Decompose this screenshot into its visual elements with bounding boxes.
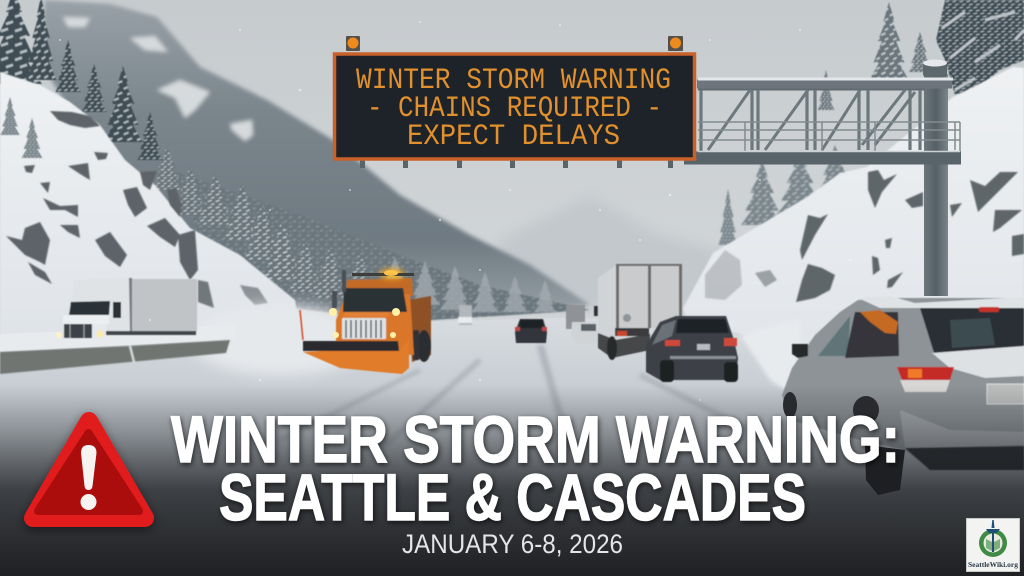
forest band trees <box>152 146 377 300</box>
left slope rocks <box>6 111 268 308</box>
vehicle: large silver SUV <box>782 296 1024 470</box>
background: right forest <box>718 145 856 245</box>
plow lights <box>329 269 414 338</box>
date subtitle: JANUARY 6-8, 2026 <box>402 529 623 559</box>
sign message text: - CHAINS REQUIRED - <box>367 92 662 126</box>
falling snow <box>59 21 851 401</box>
background: forested mountain <box>40 0 590 320</box>
vehicle: orange snow plow truck <box>300 270 431 374</box>
vehicle: distant car <box>515 319 547 343</box>
vehicle: white semi truck <box>56 278 197 339</box>
trees: top left <box>0 0 163 160</box>
title: SEATTLE & CASCADES <box>219 460 806 534</box>
background: far valley ridge <box>480 195 720 310</box>
forest band behind slope <box>170 170 590 322</box>
sign: mounting brackets <box>360 160 673 168</box>
left snowy slope <box>0 72 300 345</box>
sign: amber beacons <box>346 36 683 51</box>
big SUV wheels <box>783 392 905 495</box>
gantry: steel post <box>923 60 948 296</box>
right snowy slope <box>683 67 1024 400</box>
warning triangle icon <box>33 421 145 518</box>
trees: top right <box>936 0 1024 95</box>
gantry: truss walkway <box>684 79 961 158</box>
title: WINTER STORM WARNING: <box>171 402 900 476</box>
variable message sign <box>334 54 694 159</box>
road surface <box>0 318 1024 576</box>
title <box>171 402 900 534</box>
road haze around plow <box>190 305 370 375</box>
right slope rocks <box>705 170 1024 302</box>
vehicle: queued cars and distant truck <box>566 305 598 344</box>
sign message text: EXPECT DELAYS <box>407 120 620 154</box>
logo: SeattleWiki.org badge <box>966 518 1020 572</box>
bottom dark gradient <box>0 385 1024 576</box>
sign message text: WINTER STORM WARNING <box>356 64 671 98</box>
guard barrier <box>0 340 230 374</box>
sign message text <box>356 64 671 154</box>
far forest trees <box>378 257 556 312</box>
small trees on left slope <box>0 97 42 158</box>
road tracks <box>280 345 790 450</box>
trees behind gantry <box>818 2 931 110</box>
exclamation mark <box>80 445 96 510</box>
vehicle: white box truck rear <box>594 264 682 360</box>
logo: SeattleWiki.org badge: SeattleWiki.org <box>968 560 1018 569</box>
snowy bank on right road edge <box>740 320 800 400</box>
vehicle: distant truck on far lane <box>458 305 472 325</box>
vehicle: dark SUV <box>646 316 738 382</box>
road snow bank left <box>0 325 235 352</box>
